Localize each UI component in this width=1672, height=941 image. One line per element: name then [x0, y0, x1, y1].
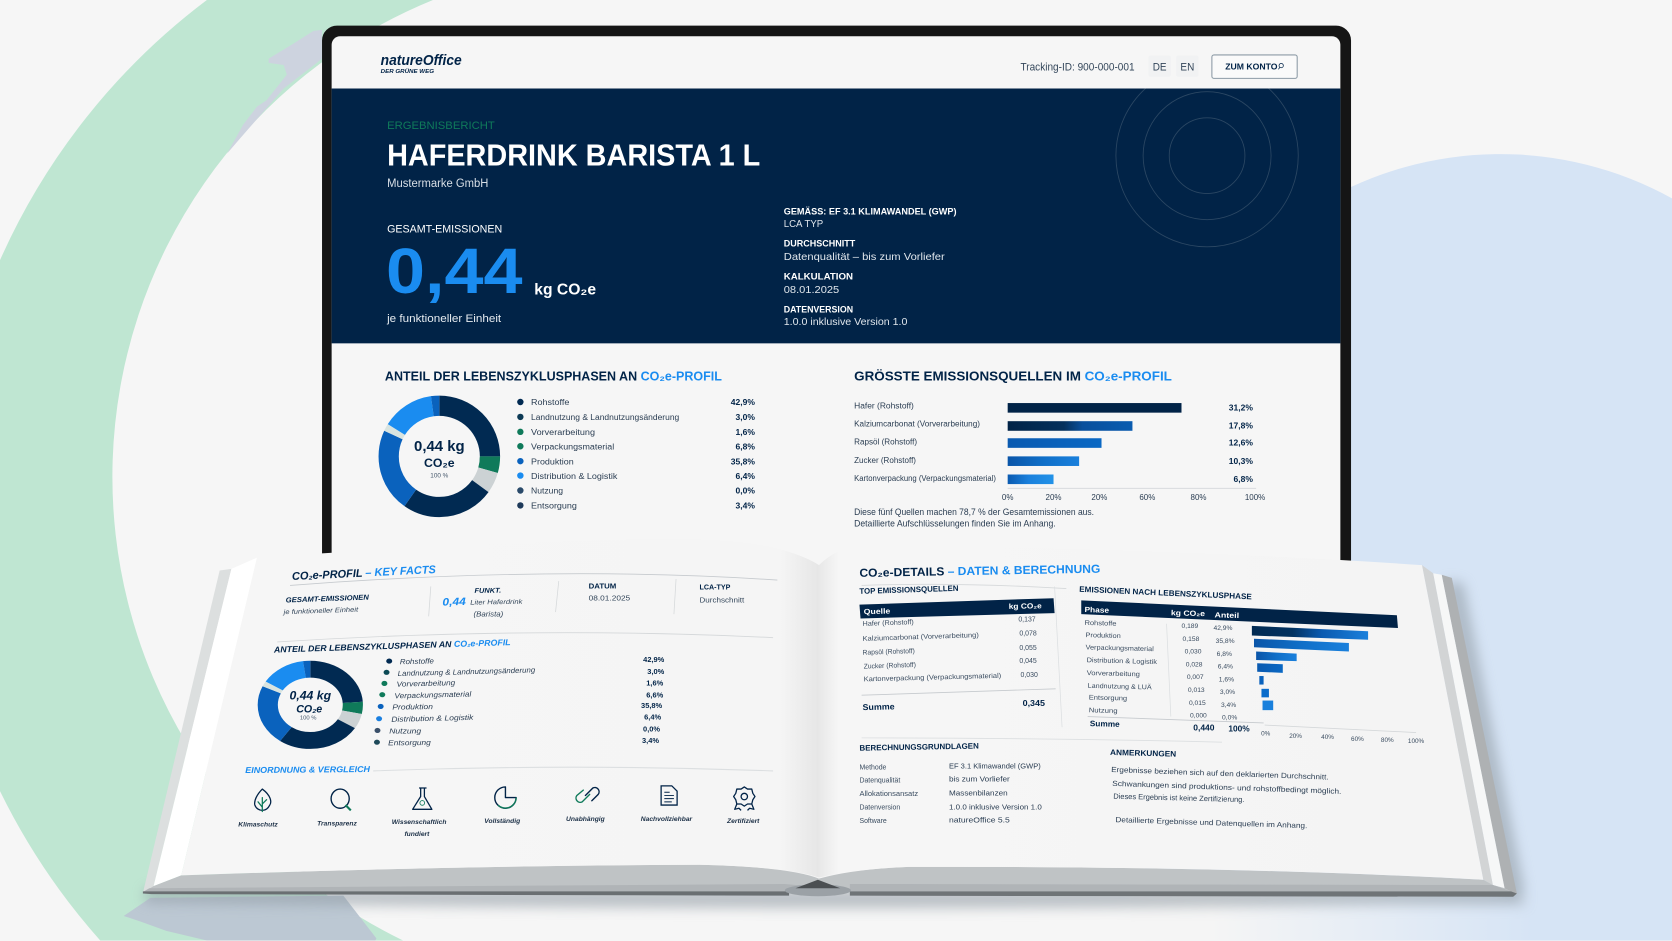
- bar chart: top sources: 100%: [1245, 493, 1265, 502]
- phase totals: [1090, 719, 1250, 733]
- legend: Produktion: [531, 456, 574, 466]
- key fact: date: DATUM: [589, 584, 617, 591]
- phase bar chart: 0%: [1261, 731, 1271, 738]
- table: top sources: Rapsöl (Rohstoff): [863, 648, 915, 657]
- bar chart: top sources: 17,8%: [1229, 421, 1253, 431]
- table: top sources: Hafer (Rohstoff): [862, 619, 914, 628]
- legend: Landnutzung & Landnutzungsänderung: [398, 665, 536, 678]
- heading: largest sources: GRÖSSTE EMISSIONSQUELLEN IM CO₂e-PROFIL: [854, 369, 1172, 384]
- key fact: total emissions: [282, 593, 370, 616]
- phase rows: 3,4%: [1221, 702, 1236, 709]
- calculation basis: [859, 742, 1042, 825]
- hero banner: [332, 65, 1340, 343]
- label: Vollständig: [484, 818, 520, 825]
- legend: 42,9%: [731, 397, 755, 407]
- language switch: [1148, 55, 1199, 77]
- notes: ANMERKUNGEN: [1110, 748, 1177, 759]
- calculation basis: 1.0.0 inklusive Version 1.0: [949, 802, 1042, 811]
- phase rows: 6,4%: [1218, 664, 1233, 671]
- donut chart: [268, 669, 353, 740]
- legend: Distribution & Logistik: [391, 713, 475, 724]
- table: top sources: 0,345: [1023, 699, 1046, 708]
- methodology facts: 1.0.0 inklusive Version 1.0: [784, 317, 908, 328]
- phase rows: 0,158: [1183, 636, 1200, 643]
- label: Unabhängig: [566, 816, 605, 823]
- bar chart: top sources: Rapsöl (Rohstoff): [854, 437, 917, 447]
- phase rows: [1084, 620, 1237, 722]
- chart note: Detaillierte Aufschlüsselungen finden Sie im Anhang.: [854, 519, 1056, 529]
- icon: document: [661, 786, 677, 805]
- phase rows: 6,8%: [1217, 651, 1232, 658]
- laptop frame: [322, 26, 1351, 580]
- phase totals: 100%: [1228, 724, 1250, 733]
- calculation basis: Allokationsansatz: [859, 791, 919, 798]
- table: top sources: 0,137: [1018, 617, 1036, 624]
- bar chart: top sources: 31,2%: [1229, 403, 1253, 413]
- icon: badge: [734, 787, 755, 810]
- eyebrow: ERGEBNISBERICHT: [387, 120, 495, 132]
- table: top sources: [859, 584, 1056, 712]
- phase rows: 1,6%: [1219, 676, 1234, 683]
- calculation basis: Massenbilanzen: [949, 788, 1008, 797]
- legend: Landnutzung & Landnutzungsänderung: [531, 412, 680, 422]
- legend: Produktion: [392, 702, 433, 712]
- product title: HAFERDRINK BARISTA 1 L: [387, 137, 760, 172]
- legend: 3,4%: [736, 501, 755, 511]
- table: top sources: Kartonverpackung (Verpackungsmaterial): [864, 673, 1001, 683]
- left page content: [238, 564, 777, 838]
- table: life cycle phases: EMISSIONEN NACH LEBENSZYKLUSPHASE: [1079, 585, 1253, 601]
- bar chart: top sources: [854, 400, 1265, 502]
- label: Nachvollziehbar: [641, 816, 693, 823]
- navigation bar: [381, 52, 1297, 78]
- legend: 1,6%: [736, 427, 755, 437]
- phase rows: Entsorgung: [1089, 694, 1128, 702]
- bar chart: top sources: Hafer (Rohstoff): [854, 400, 914, 410]
- tracking id: Tracking-ID: 900-000-001: [1020, 61, 1135, 73]
- phase bar chart: [1252, 626, 1425, 745]
- key fact: functional unit: Liter Haferdrink: [470, 599, 523, 607]
- account button: ZUM KONTO: [1225, 61, 1278, 71]
- phase rows: 0,015: [1189, 700, 1206, 707]
- icon: pie chart: [495, 787, 516, 808]
- donut chart: 0,44 kg: [290, 688, 332, 702]
- table: top sources: kg CO₂e: [1009, 601, 1042, 611]
- key fact: functional unit: [442, 588, 523, 618]
- phase bar chart: 100%: [1408, 738, 1425, 745]
- donut chart: 100 %: [300, 716, 316, 722]
- key fact: lca type: [700, 585, 744, 604]
- table: top sources: 0,078: [1019, 631, 1037, 638]
- phase bar chart: 60%: [1351, 736, 1364, 743]
- total emissions: GESAMT-EMISSIONEN: [387, 223, 502, 235]
- right cover dark edge: [1442, 575, 1517, 897]
- bar chart: top sources: Zucker (Rohstoff): [854, 455, 916, 465]
- label: Zertifiziert: [726, 818, 760, 825]
- phase totals: Summe: [1090, 719, 1120, 729]
- legend values: [641, 655, 665, 745]
- legend: 35,8%: [731, 456, 755, 466]
- table: top sources: 0,030: [1020, 672, 1038, 679]
- legend values: 3,0%: [647, 667, 665, 676]
- phase rows: 0,0%: [1222, 715, 1237, 722]
- calculation basis: bis zum Vorliefer: [949, 775, 1010, 784]
- phase rows: 0,013: [1188, 687, 1205, 694]
- legend values: 6,4%: [644, 713, 661, 722]
- right band dark edge: [850, 891, 1517, 897]
- key fact: lca type: LCA-TYP: [700, 585, 731, 592]
- key fact: total emissions: je funktioneller Einheit: [282, 607, 360, 616]
- phase rows: Vorverarbeitung: [1087, 670, 1140, 678]
- legend: Rohstoffe: [531, 397, 570, 407]
- bar chart: top sources: 20%: [1046, 493, 1062, 502]
- bar chart: top sources: 10,3%: [1229, 456, 1253, 466]
- legend: [374, 656, 536, 747]
- fade of blue under the book: [1130, 894, 1536, 940]
- legend: Verpackungsmaterial: [394, 689, 472, 700]
- legend: Verpackungsmaterial: [531, 441, 614, 451]
- label: Transparenz: [317, 820, 357, 827]
- methodology facts: DURCHSCHNITT: [784, 238, 855, 249]
- methodology facts: DATENVERSION: [784, 304, 853, 315]
- donut chart: [389, 406, 490, 507]
- heading: life cycle share: ANTEIL DER LEBENSZYKLUSPHASEN AN CO₂e-PROFIL: [273, 637, 511, 655]
- logo: [381, 52, 462, 75]
- logo: DER GRÜNE WEG: [381, 68, 434, 75]
- right page content: [859, 563, 1425, 830]
- table: top sources: Zucker (Rohstoff): [864, 662, 916, 671]
- icon: chain link: [576, 788, 599, 802]
- language switch: EN: [1180, 61, 1194, 73]
- phase rows: 0,030: [1185, 649, 1202, 656]
- background: green ring: [0, 0, 433, 940]
- key fact: total emissions: GESAMT-EMISSIONEN: [286, 593, 370, 604]
- table: top sources: Summe: [862, 701, 895, 712]
- calculation basis: Methode: [859, 764, 887, 771]
- legend values: 3,4%: [642, 736, 659, 745]
- table: top sources: 0,045: [1019, 658, 1037, 665]
- phase rows: 0,007: [1187, 674, 1204, 681]
- bar chart: top sources: Kalziumcarbonat (Vorverarbeitung): [854, 419, 980, 429]
- calculation basis: Software: [859, 818, 887, 825]
- left band lower stripe: [143, 884, 819, 892]
- key fact: lca type: Durchschnitt: [700, 597, 744, 604]
- total emissions: 0,44: [386, 235, 523, 307]
- right white strip: [1433, 573, 1505, 888]
- bar chart: top sources: 6,8%: [1234, 474, 1253, 484]
- phase rows: Landnutzung & LUÄ: [1088, 682, 1152, 691]
- logo: natureOffice: [381, 52, 462, 69]
- notes: Schwankungen sind produktions- und rohstoffbedingt möglich.: [1112, 779, 1342, 796]
- heading: life cycle share: ANTEIL DER LEBENSZYKLUSPHASEN AN CO₂e-PROFIL: [385, 369, 722, 384]
- icon: magnifier: [331, 789, 351, 810]
- icon: leaf: [255, 789, 271, 811]
- key fact: functional unit: FUNKT.: [474, 588, 501, 595]
- legend: Vorverarbeitung: [396, 678, 456, 689]
- notes: Dieses Ergebnis ist keine Zertifizierung.: [1113, 792, 1245, 804]
- calculation basis: natureOffice 5.5: [949, 816, 1010, 825]
- calculation basis: Datenversion: [859, 804, 900, 811]
- shadow below book: [145, 581, 1527, 908]
- legend: Nutzung: [389, 727, 422, 736]
- total emissions: [386, 223, 596, 325]
- heading: key facts: CO₂e-PROFIL – KEY FACTS: [292, 564, 437, 583]
- phase bar chart: 80%: [1381, 737, 1394, 744]
- left cover edge: [143, 569, 231, 893]
- label: Klimaschutz: [238, 821, 278, 828]
- phase rows: Produktion: [1085, 632, 1121, 640]
- phase rows: Nutzung: [1089, 707, 1118, 715]
- label: [392, 819, 446, 838]
- left page: [181, 538, 819, 878]
- phase rows: 0,189: [1181, 623, 1199, 630]
- legend values: 6,6%: [646, 690, 664, 699]
- donut chart: 100 %: [430, 473, 449, 480]
- methodology facts: KALKULATION: [784, 271, 853, 282]
- phase rows: 42,9%: [1213, 625, 1233, 632]
- calculation basis: Datenqualität: [859, 778, 900, 785]
- open book: [143, 538, 1517, 897]
- bar chart: top sources: 12,6%: [1229, 438, 1253, 448]
- phase bar chart: 20%: [1289, 733, 1302, 740]
- donut chart: CO₂e: [296, 703, 322, 715]
- laptop screen: [332, 36, 1340, 580]
- table: life cycle phases: Phase: [1084, 605, 1109, 615]
- left band dark edge: [143, 891, 789, 896]
- label: fundiert: [404, 831, 430, 838]
- legend values: 1,6%: [646, 679, 664, 688]
- methodology facts: Datenqualität – bis zum Vorliefer: [784, 252, 945, 263]
- notes: Detaillierte Ergebnisse und Datenquellen im Anhang.: [1115, 815, 1307, 830]
- legend: Distribution & Logistik: [531, 471, 618, 481]
- heading: classification: EINORDNUNG & VERGLEICH: [245, 764, 371, 775]
- legend values: 0,0%: [643, 724, 660, 733]
- table: top sources: Quelle: [864, 606, 890, 616]
- chart note: Diese fünf Quellen machen 78,7 % der Gesamtemissionen aus.: [854, 507, 1094, 517]
- bar chart: top sources: 80%: [1191, 493, 1207, 502]
- legend: Nutzung: [531, 486, 563, 496]
- legend: Entsorgung: [388, 738, 432, 747]
- bar chart: top sources: 0%: [1002, 493, 1013, 502]
- account button: [1212, 55, 1297, 78]
- decorative rings: [1116, 88, 1299, 248]
- left page band: [145, 865, 819, 894]
- legend: 6,4%: [736, 471, 755, 481]
- calculation basis: EF 3.1 Klimawandel (GWP): [949, 761, 1041, 770]
- bar chart: top sources: Kartonverpackung (Verpackungsmaterial): [854, 473, 996, 483]
- table: top sources: TOP EMISSIONSQUELLEN: [859, 584, 959, 596]
- table: life cycle phases: [1079, 585, 1425, 745]
- book spine: [785, 880, 851, 896]
- heading: details: CO₂e-DETAILS – DATEN & BERECHNUNG: [859, 563, 1100, 580]
- total emissions: je funktioneller Einheit: [386, 313, 502, 325]
- phase rows: 0,028: [1186, 661, 1203, 668]
- notes: Ergebnisse beziehen sich auf den deklarierten Durchschnitt.: [1111, 765, 1329, 782]
- legend: 0,0%: [736, 486, 755, 496]
- left white strip: [154, 558, 257, 886]
- table: life cycle phases: Anteil: [1214, 610, 1239, 620]
- laptop: [322, 26, 1351, 580]
- chart note: [854, 507, 1094, 529]
- right band lower stripe: [850, 884, 1511, 891]
- legend: 6,8%: [736, 441, 755, 451]
- total emissions: kg CO₂e: [534, 281, 596, 298]
- phase rows: 0,000: [1190, 713, 1207, 720]
- key fact: functional unit: (Barista): [473, 611, 503, 618]
- phase rows: Verpackungsmaterial: [1085, 644, 1154, 653]
- bar chart: top sources: 60%: [1139, 493, 1155, 502]
- phase rows: Distribution & Logistik: [1087, 657, 1158, 666]
- key fact: date: [589, 584, 630, 602]
- donut chart: CO₂e: [424, 456, 455, 470]
- table: top sources: Kalziumcarbonat (Vorverarbeitung): [863, 632, 979, 643]
- methodology facts: [784, 206, 956, 328]
- right page band: [819, 867, 1511, 891]
- legend values: 35,8%: [641, 701, 663, 710]
- language switch: DE: [1153, 61, 1167, 73]
- legend: 3,0%: [736, 412, 755, 422]
- phase bar chart: 40%: [1321, 734, 1334, 741]
- methodology facts: GEMÄSS: EF 3.1 KLIMAWANDEL (GWP): [784, 206, 956, 217]
- table: life cycle phases: kg CO₂e: [1171, 608, 1205, 618]
- calculation basis: BERECHNUNGSGRUNDLAGEN: [859, 742, 979, 753]
- legend: Entsorgung: [531, 501, 577, 511]
- right page edge: [1422, 565, 1493, 885]
- donut chart: 0,44 kg: [414, 438, 465, 455]
- icon: flask: [413, 788, 432, 809]
- legend values: 42,9%: [643, 655, 665, 664]
- key fact: date: 08.01.2025: [589, 593, 630, 602]
- legend: Vorverarbeitung: [531, 427, 595, 437]
- notes: [1110, 748, 1342, 830]
- methodology facts: 08.01.2025: [784, 285, 840, 296]
- phase totals: 0,440: [1193, 723, 1215, 732]
- bar chart: top sources: 20%: [1091, 493, 1107, 502]
- label: Wissenschaftlich: [392, 819, 446, 826]
- legend: [517, 397, 755, 511]
- company: Mustermarke GmbH: [387, 177, 488, 190]
- phase rows: Rohstoffe: [1084, 620, 1117, 628]
- background: blue circle: [1145, 154, 1672, 940]
- phase rows: 35,8%: [1216, 638, 1235, 645]
- phase rows: 3,0%: [1220, 689, 1235, 696]
- methodology facts: LCA TYP: [784, 219, 823, 230]
- right page: [819, 545, 1483, 880]
- table: top sources: 0,055: [1019, 645, 1037, 652]
- key fact: functional unit: 0,44: [442, 596, 466, 609]
- legend: Rohstoffe: [400, 656, 434, 666]
- background: grey smudges: [124, 30, 376, 940]
